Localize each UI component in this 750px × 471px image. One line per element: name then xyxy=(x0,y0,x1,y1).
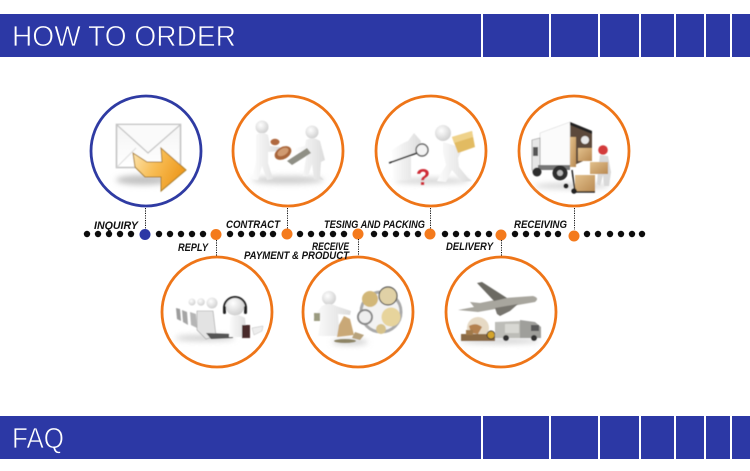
receiving circle xyxy=(519,96,629,206)
receive payment label: RECEIVE xyxy=(312,241,350,253)
footer band: faq xyxy=(0,416,750,459)
inquiry label: INQUIRY xyxy=(94,220,139,232)
step: delivery xyxy=(446,241,556,367)
receive payment label: PAYMENT & PRODUCT xyxy=(244,250,350,262)
icon: inspector with magnifier and carrier with box: ? xyxy=(416,164,430,190)
step: contract xyxy=(226,96,343,231)
reply circle xyxy=(162,257,272,367)
step: inquiry xyxy=(91,96,201,232)
testing circle xyxy=(376,96,486,206)
inquiry circle xyxy=(91,96,201,206)
icon: truck being unloaded xyxy=(532,122,611,194)
icon: inspector with magnifier and carrier with box xyxy=(389,125,475,190)
contract circle xyxy=(233,96,343,206)
contract label: CONTRACT xyxy=(226,219,281,231)
timeline step markers xyxy=(140,228,580,242)
receiving label: RECEIVING xyxy=(514,219,567,231)
header band: how to order xyxy=(0,14,750,57)
dotted connectors xyxy=(146,208,574,257)
step: receive payment and product xyxy=(244,241,413,367)
footer band: faq: FAQ xyxy=(12,423,64,455)
payment circle xyxy=(303,257,413,367)
icon: two figures exchanging a stamp xyxy=(252,120,325,184)
icon: call centre agent with headset xyxy=(175,296,263,341)
reply label: REPLY xyxy=(178,242,209,254)
header band: how to order: HOW TO ORDER xyxy=(12,21,236,53)
delivery label: DELIVERY xyxy=(446,241,494,253)
receive payment label xyxy=(244,241,350,262)
icon: figure with money bag and gears xyxy=(313,287,401,345)
delivery circle xyxy=(446,257,556,367)
icon: envelope with arrow xyxy=(116,124,186,191)
step: receiving xyxy=(514,96,629,231)
step: testing and packing xyxy=(324,96,486,231)
testing label: TESING AND PACKING xyxy=(324,219,425,231)
icon: plane, globe and truck xyxy=(458,282,541,344)
step: reply xyxy=(162,242,272,367)
timeline dots xyxy=(84,231,645,237)
